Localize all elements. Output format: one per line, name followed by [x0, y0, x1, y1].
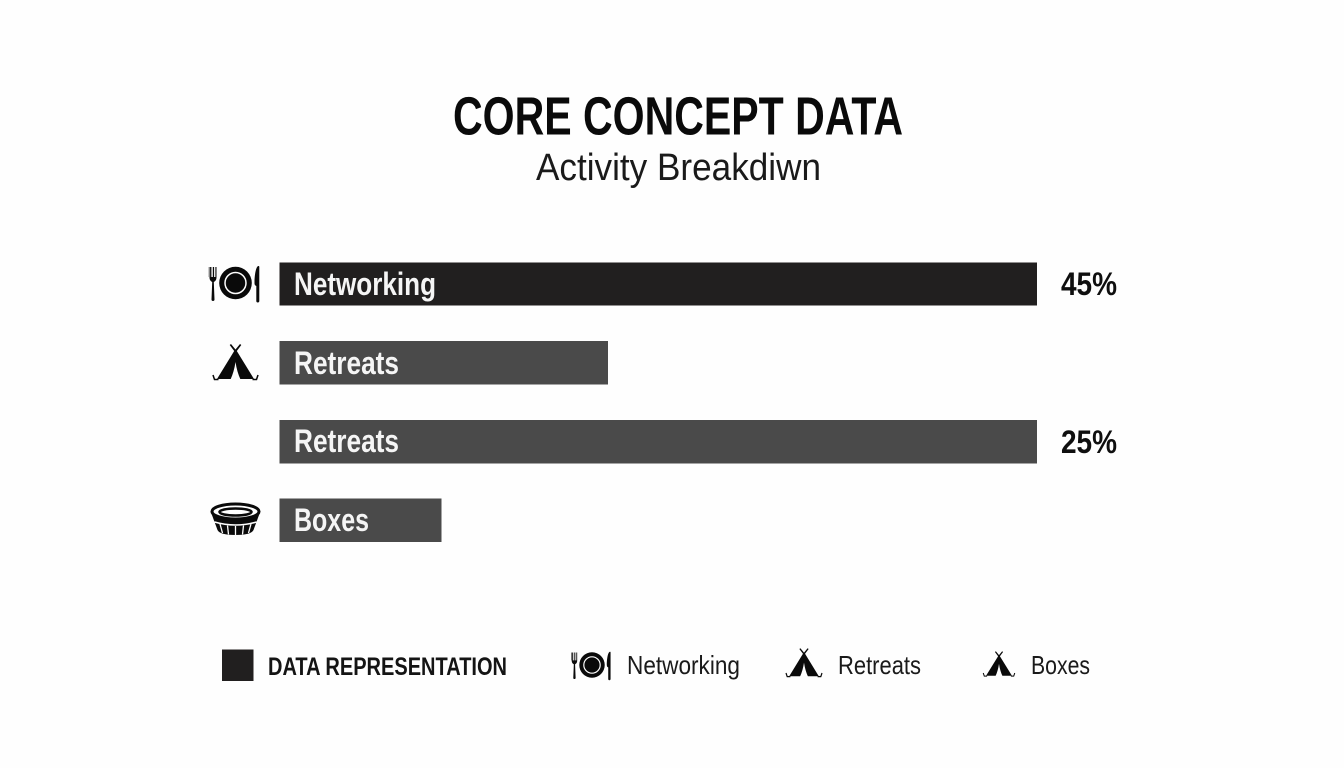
heading: main title: CORE CONCEPT DATA [453, 86, 903, 146]
value: 45%: 45% [1061, 266, 1117, 302]
bar chart [209, 262, 1117, 542]
legend item: Boxes [983, 650, 1090, 680]
row: Boxes [210, 498, 442, 542]
icon: tent [983, 651, 1015, 676]
bar: Retreats short [280, 341, 608, 384]
bar label: Retreats short: Retreats [294, 345, 399, 381]
icon: basket [210, 504, 260, 535]
bar label: Boxes: Boxes [294, 502, 369, 538]
row: Retreats 25% [280, 420, 1117, 464]
bar: Retreats long [280, 420, 1037, 464]
legend label: Boxes: Boxes [1031, 650, 1090, 680]
icon: plate and cutlery [209, 266, 259, 302]
bar label: Networking: Networking [294, 266, 436, 302]
row: Networking 45% [209, 262, 1117, 306]
title [453, 86, 903, 189]
legend label: Retreats: Retreats [838, 650, 921, 680]
legend [222, 648, 1090, 681]
bar label: Retreats long: Retreats [294, 423, 399, 459]
row: Retreats short [213, 341, 608, 384]
legend label: Networking: Networking [627, 650, 740, 680]
legend title: DATA REPRESENTATION [268, 653, 507, 681]
legend item: Networking [571, 650, 740, 680]
icon: tent [213, 344, 258, 380]
legend item: Retreats [786, 648, 921, 680]
heading: subtitle: Activity Breakdiwn [536, 147, 821, 189]
bar: Boxes [280, 498, 442, 542]
icon: tent [786, 648, 822, 677]
value: 25%: 25% [1061, 424, 1117, 460]
legend swatch: data representation [222, 650, 507, 681]
icon: plate and cutlery [571, 652, 611, 680]
bar: Networking [280, 262, 1037, 306]
